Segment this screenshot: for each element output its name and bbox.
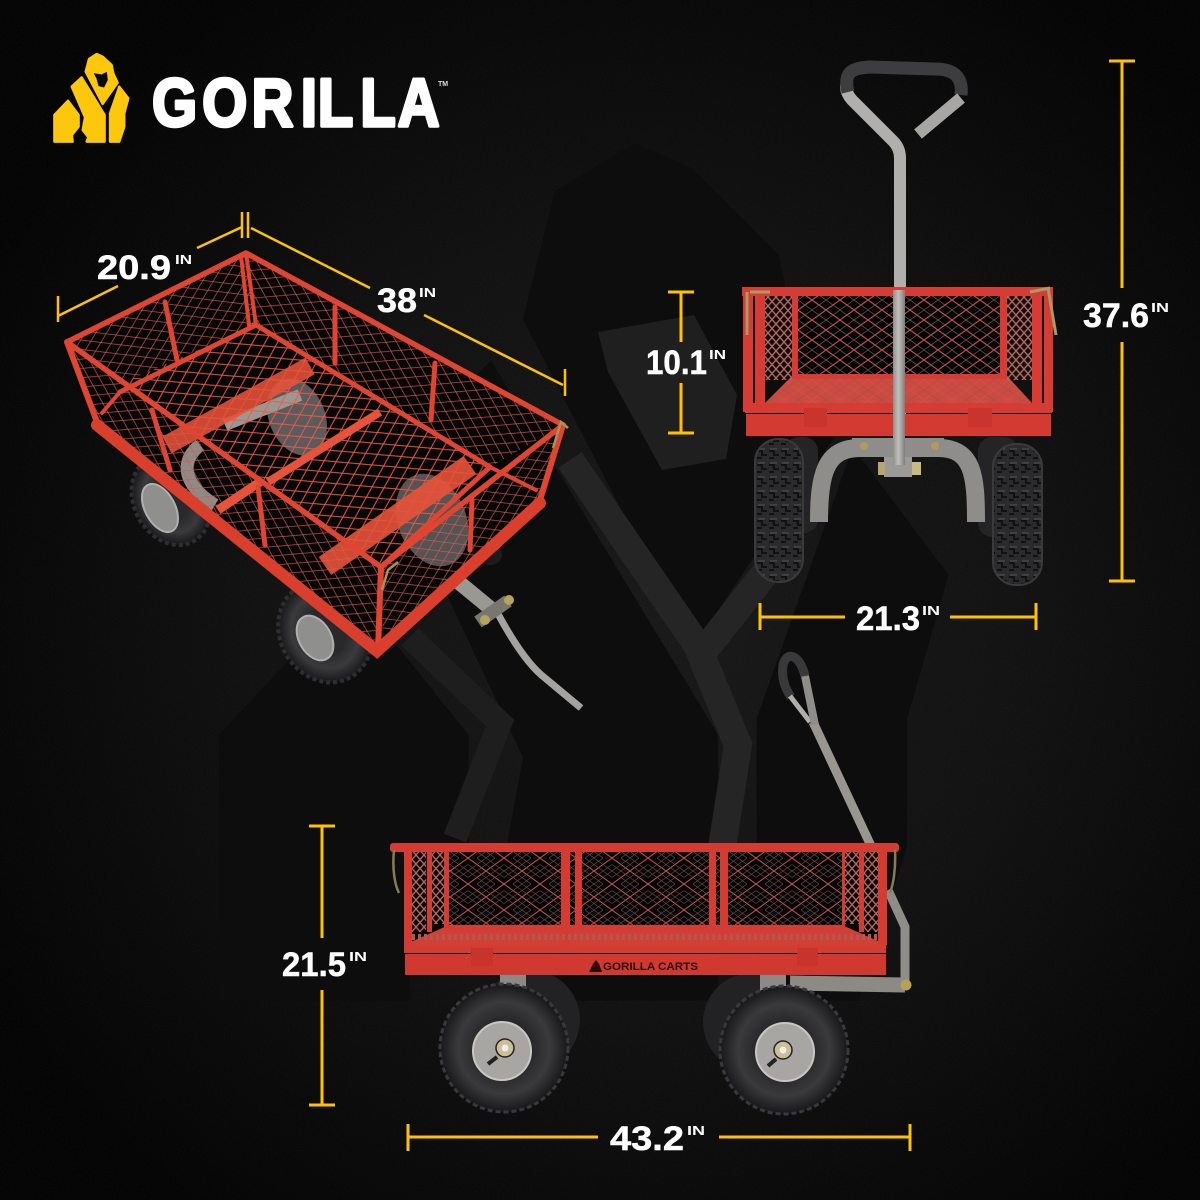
gorilla carts mark [589,960,602,972]
logo wordmark: GORILLA [152,66,440,141]
handle [783,656,912,990]
value: 38 [377,282,417,320]
dimension: 21.5 in [282,826,367,1105]
pull handle [450,575,581,708]
unit: IN [709,347,726,362]
wheels [116,441,502,700]
cart underside [67,253,563,652]
dimension: 37.6 in [1083,61,1169,581]
wagon: side view [390,656,912,1114]
wheel struts [500,975,786,997]
unit: IN [1151,300,1169,315]
unit: IN [419,285,436,300]
value: 21.3 [856,600,920,638]
frame [67,253,563,651]
rear wheels [785,437,1018,537]
rear wheels [480,970,801,1071]
unit: IN [175,252,192,267]
dimension: 43.2 in [408,1120,910,1158]
front wheels [755,439,1042,585]
unit: IN [349,949,367,964]
logo icon: gorilla [54,54,128,142]
dimension: 21.3 in [760,600,1036,638]
wagon: angled top view [67,253,581,708]
value: 37.6 [1083,297,1149,335]
parts seen through floor [187,369,482,577]
dimension: 20.9 in [58,212,242,322]
latch pins [382,422,568,590]
floor mesh [120,325,490,567]
gorilla carts label: GORILLA CARTS [603,961,698,973]
unit: IN [922,603,940,618]
value: 43.2 [610,1120,684,1158]
unit: IN [687,1123,705,1138]
dimension: 38 in [248,212,565,396]
value: 21.5 [282,946,346,984]
logo [54,54,440,142]
gorilla watermark [219,143,949,1001]
cart bed [742,287,1056,465]
bracket [860,442,939,477]
floor beams [167,366,470,566]
side walls mesh [67,253,563,650]
wagon: rear view [742,67,1056,585]
dimension: 10.1 in [646,292,726,433]
value: 10.1 [646,344,707,382]
axle frame [819,438,976,522]
cart bed and rails [390,843,899,975]
handle [846,67,961,420]
wheel: front right [720,986,848,1114]
trademark: TM [438,81,448,88]
wheel: front left [440,984,568,1112]
value: 20.9 [97,249,171,287]
